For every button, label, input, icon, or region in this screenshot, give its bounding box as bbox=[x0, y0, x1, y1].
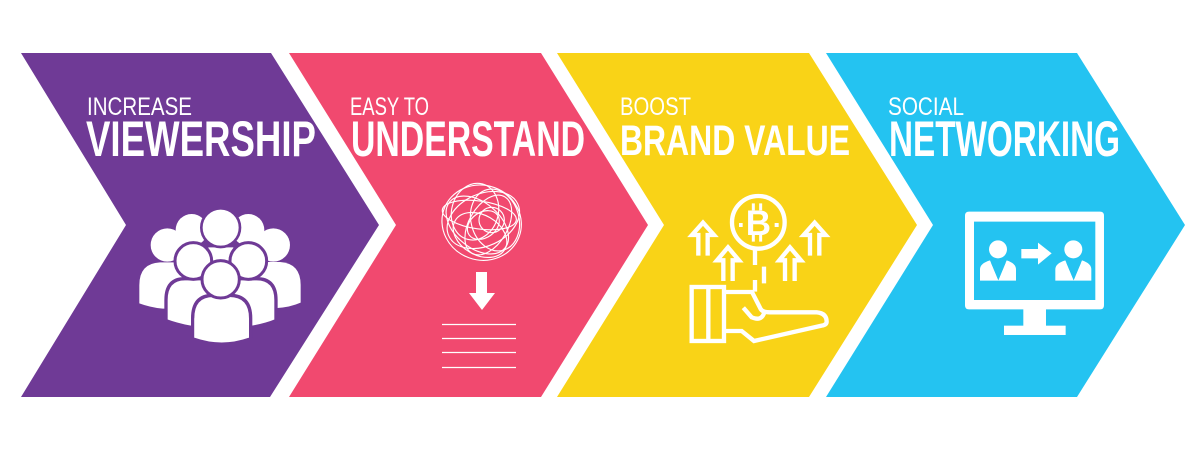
icon: hand with rising bitcoin: B bbox=[746, 204, 771, 243]
heading: boost: BOOST bbox=[620, 93, 691, 121]
chevron: yellow bbox=[557, 53, 917, 397]
icon: hand with rising bitcoin bbox=[692, 196, 827, 341]
panel: boost brand value bbox=[557, 53, 917, 397]
icon: down arrow bbox=[469, 272, 495, 310]
heading: brand value: BRAND VALUE bbox=[620, 117, 850, 165]
chevron: purple bbox=[21, 53, 379, 397]
heading: social: SOCIAL bbox=[888, 93, 964, 121]
panel: easy to understand bbox=[289, 53, 648, 397]
heading: viewership: VIEWERSHIP bbox=[86, 111, 316, 167]
icon: straight lines bbox=[442, 324, 516, 368]
heading: easy to: EASY TO bbox=[350, 93, 429, 121]
panel: increase viewership bbox=[21, 53, 379, 397]
chevron: pink bbox=[289, 53, 648, 397]
icon: crowd of people bbox=[139, 208, 301, 350]
panel: social networking bbox=[826, 53, 1185, 397]
chevron: blue bbox=[826, 53, 1185, 397]
heading: understand: UNDERSTAND bbox=[351, 111, 585, 167]
icon: monitor with two people bbox=[965, 212, 1104, 335]
icon: tangled scribble bbox=[431, 174, 532, 271]
heading: increase: INCREASE bbox=[87, 93, 192, 121]
